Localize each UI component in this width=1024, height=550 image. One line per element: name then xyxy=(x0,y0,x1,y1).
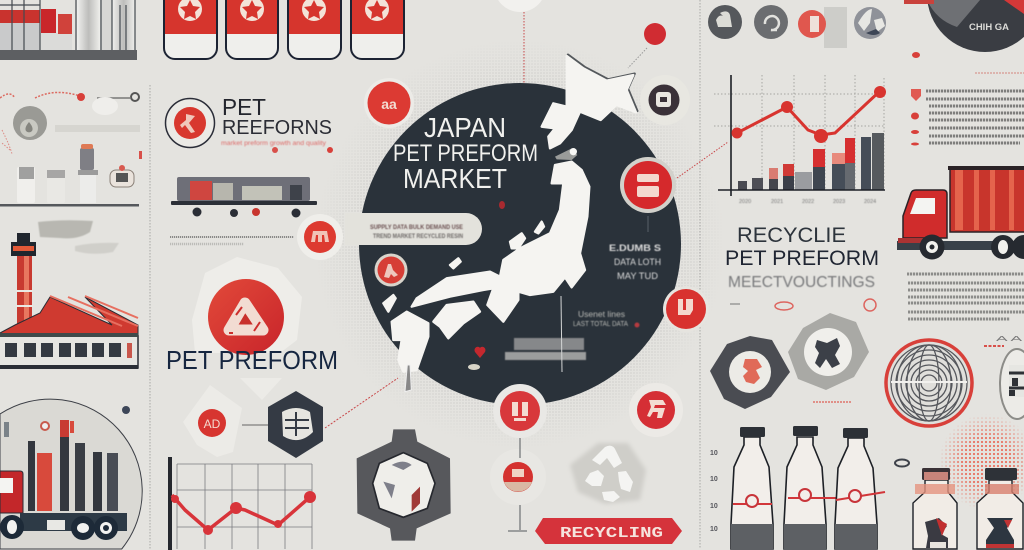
callout: white text on map: MAY TUD xyxy=(617,271,659,281)
icon: red bottle 3 xyxy=(288,0,341,59)
heading: recycle PET preform xyxy=(725,224,879,291)
connector: badges to recycling pill xyxy=(508,438,527,531)
trend line xyxy=(737,91,880,135)
callout: white text on map: DATA LOTH xyxy=(614,257,661,267)
icon row: top right xyxy=(708,5,886,48)
icon: dark hexagon xyxy=(268,391,323,458)
icon: red truck xyxy=(897,166,1024,260)
icon row: red bottles xyxy=(164,0,404,59)
icon: tag right xyxy=(1000,349,1024,419)
text block: below truck xyxy=(907,274,1024,319)
icon: grey circle xyxy=(754,5,788,39)
subheading: MEECTVOUCTINGS xyxy=(728,274,875,291)
roof xyxy=(0,297,138,337)
badge: lower right of map xyxy=(663,286,709,332)
building xyxy=(0,336,138,368)
title line: Japan: JAPAN xyxy=(424,112,506,143)
heading: PET: PET xyxy=(222,94,266,120)
icon: truck xyxy=(0,471,127,540)
x axis labels: 2020 xyxy=(739,199,751,205)
icon: jar 1 xyxy=(913,468,957,549)
small side glyphs: 10 xyxy=(710,526,718,533)
icon: dark gear centre xyxy=(729,351,771,393)
grid xyxy=(714,75,884,190)
map of Japan xyxy=(383,55,637,392)
badge: left inside map xyxy=(374,254,408,286)
factory illustration xyxy=(0,233,138,369)
badge: lower right xyxy=(629,383,683,437)
callout: white text on map xyxy=(609,243,661,281)
text block: right with bullets xyxy=(911,52,1024,146)
callout: lower map text: LAST TOTAL DATA xyxy=(573,321,628,328)
badge: lower centre xyxy=(490,449,546,505)
title line: PET Preform: PET PREFORM xyxy=(393,140,538,167)
bars xyxy=(4,420,118,511)
icon: bottle 2 xyxy=(784,426,840,550)
pie chart: top right xyxy=(904,0,1024,52)
marks above tag: A A xyxy=(996,336,1023,343)
label: recycling pill: RECYCLING xyxy=(560,525,663,542)
panel: truck and bars circle xyxy=(0,399,142,549)
badge: right of map xyxy=(620,157,676,213)
Kyushu xyxy=(392,312,428,372)
icon: dark gear with recycling xyxy=(357,429,451,541)
caption: dotted text lines xyxy=(170,237,294,244)
badge: left arm xyxy=(297,214,343,260)
heading line: recycle: RECYCLIE xyxy=(737,224,846,247)
icon: chimney xyxy=(11,233,36,326)
icon: bottle 3 xyxy=(835,428,885,550)
icon: dark circle xyxy=(708,5,742,39)
heading block: PET preforms xyxy=(166,94,333,153)
x axis labels: 2022 xyxy=(802,199,814,205)
icon: small curl xyxy=(895,460,909,466)
icon: white hexagon badge: AD xyxy=(204,417,221,431)
icon: white recycling gear xyxy=(192,257,302,400)
title line: Market: MARKET xyxy=(403,163,507,194)
callout: market pill xyxy=(345,213,482,245)
icon: preform bottles on shelf xyxy=(17,144,142,203)
panel: left preform shelf xyxy=(0,92,142,254)
red dotted cloud xyxy=(941,417,1023,506)
small side glyphs xyxy=(710,450,718,533)
red dash mark xyxy=(984,345,1004,347)
map dividers and pins xyxy=(468,201,648,372)
x axis labels xyxy=(739,199,876,205)
icon: bottle 1 xyxy=(731,427,773,550)
heading: preforms: REEFORNS xyxy=(222,117,332,139)
connector lines xyxy=(325,0,728,428)
chart: bars with trend line xyxy=(714,75,886,205)
icon: globe xyxy=(854,7,886,39)
small side glyphs: 10 xyxy=(710,503,718,510)
Shikoku xyxy=(433,302,480,338)
badge: top right of map xyxy=(640,75,690,125)
small side glyphs: 10 xyxy=(710,476,718,483)
small side glyphs: 10 xyxy=(710,450,718,457)
icon: red circle and tag xyxy=(798,7,847,48)
x axis labels: 2021 xyxy=(771,199,783,205)
label: recycling pill xyxy=(535,518,682,544)
pie chart: top right: CHIH GA xyxy=(969,22,1010,32)
callout: market pill: TREND MARKET RECYCLED RESIN xyxy=(373,234,463,240)
icon: production machine xyxy=(171,177,317,218)
callout: lower map text xyxy=(505,310,640,360)
icon: red emblem ring xyxy=(166,98,214,148)
icon: red bottle 2 xyxy=(226,0,278,59)
line chart: bottom xyxy=(168,457,316,550)
badge: top left of map xyxy=(364,78,414,128)
small red marks xyxy=(730,299,876,311)
icon: white hexagon badge xyxy=(183,385,242,457)
icon: white recycling symbol xyxy=(570,443,646,504)
stipple ring around map xyxy=(315,39,725,449)
icon: red bottle 1 xyxy=(164,0,217,59)
Tsugaru strait marker xyxy=(555,148,577,160)
callout: white text on map: E.DUMB S xyxy=(609,243,661,253)
x axis labels: 2023 xyxy=(833,199,845,205)
bars xyxy=(738,133,884,190)
title xyxy=(393,112,538,194)
icon: dark gear xyxy=(710,336,790,409)
panel: top left shelf with preforms xyxy=(0,0,137,60)
badge: bottom of map xyxy=(493,384,547,438)
connector: badge to hexagon xyxy=(242,424,268,426)
caption: red subtext: market preform growth and quality xyxy=(221,140,327,147)
heading: PET preform: PET PREFORM xyxy=(166,345,338,375)
icon: jar 2 xyxy=(977,468,1023,549)
icon: striped globe xyxy=(886,340,972,426)
panel: dark map circle xyxy=(359,83,681,405)
Noto and small islands xyxy=(383,222,544,312)
badge: top left of map: aa xyxy=(381,96,397,112)
callout: lower map text: Usenet lines xyxy=(578,310,625,319)
red dot and top circle xyxy=(494,0,666,45)
heading line: PET preform: PET PREFORM xyxy=(725,247,879,270)
icon: red bottle 4 xyxy=(351,0,404,59)
callout: market pill: SUPPLY DATA BULK DEMAND USE xyxy=(370,225,463,231)
Honshu xyxy=(412,162,589,322)
icon: grey gear xyxy=(788,313,869,390)
x axis labels: 2024 xyxy=(864,199,876,205)
Hokkaido xyxy=(542,56,636,148)
caption: red scribble xyxy=(813,401,851,403)
panel dividers xyxy=(150,0,700,549)
Hokkaido shadow xyxy=(568,55,637,119)
icon: grey droplet circle xyxy=(13,106,47,140)
